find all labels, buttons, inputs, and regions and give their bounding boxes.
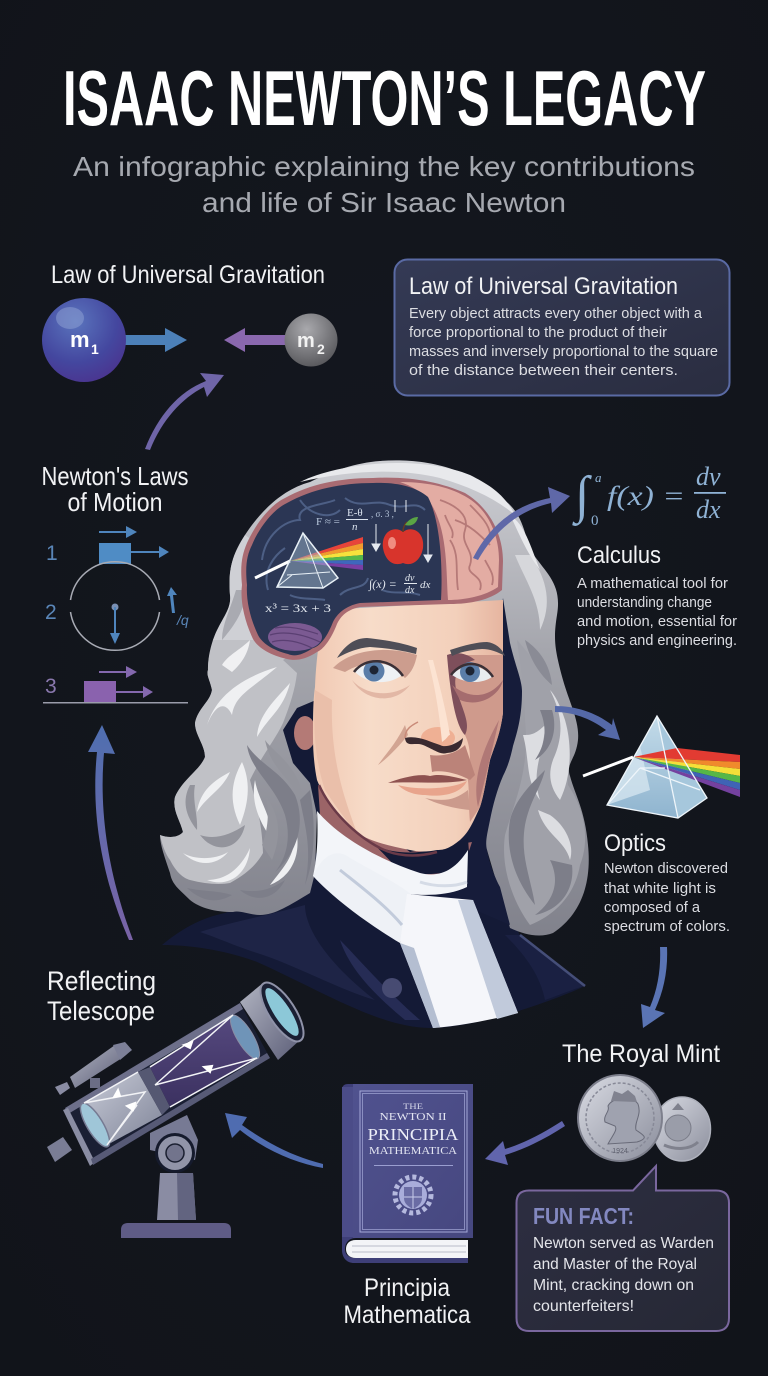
left brow: [337, 638, 417, 658]
telescope mount arm: [150, 1115, 198, 1160]
mass m1: 1: [91, 341, 99, 357]
left cheek edge shading: [314, 690, 357, 833]
brain equations: dx: [405, 585, 415, 596]
telescope rear window: [83, 1072, 162, 1145]
mass m2: m: [297, 330, 315, 352]
subtitle: [73, 151, 695, 218]
hair silhouette: [160, 460, 589, 935]
telescope front cap: [240, 983, 300, 1060]
brain equations: dv: [405, 573, 415, 584]
mini prism: [255, 533, 363, 588]
callout: fun fact: FUN FACT:: [533, 1203, 634, 1229]
text: optics: spectrum of colors.: [604, 918, 730, 935]
law 3: [43, 666, 188, 704]
arrow: optics to mint: [641, 947, 667, 1028]
telescope base: [121, 1223, 231, 1238]
mass m2: [284, 314, 338, 366]
arrow: mint to principia: [485, 1121, 565, 1165]
arrow: brain to calculus: [473, 487, 570, 560]
heading: the royal mint: The Royal Mint: [562, 1040, 720, 1068]
heading: law of universal gravitation: Law of Universal Gravitation: [51, 261, 325, 289]
heading: reflecting telescope: Reflecting: [47, 966, 156, 996]
cover text: THE: [403, 1102, 423, 1111]
arrow: motion to gravitation: [145, 373, 224, 450]
callout: fun fact: Newton served as Warden: [533, 1235, 714, 1252]
arrow: m1 force: [122, 328, 187, 352]
mass m2: 2: [317, 341, 325, 357]
text: calculus: A mathematical tool for: [577, 575, 728, 592]
cravat: [313, 811, 518, 1028]
hair: [160, 460, 589, 935]
panel: law of universal gravitation: Every object attracts every other object with a: [409, 305, 703, 322]
brain folds: [262, 498, 425, 600]
calculus formula: 0: [591, 513, 598, 529]
left dark strands: [187, 745, 314, 900]
large coin: 1924: [612, 1148, 628, 1155]
heading: reflecting telescope: [47, 966, 156, 1026]
upper left hair: [213, 535, 255, 640]
brain equations: ∫(x) =: [368, 577, 397, 591]
text: optics: Optics: [604, 830, 666, 857]
icon: coins: [577, 1074, 710, 1162]
arrow: telescope to laws of motion: [88, 725, 133, 940]
text: calculus: [577, 542, 737, 649]
telescope divider band: [138, 1067, 170, 1115]
calculus formula: dx: [696, 495, 721, 524]
brain equations: [265, 507, 430, 615]
small coin: [654, 1097, 710, 1161]
arrow: principia to telescope: [225, 1113, 323, 1168]
left eye: [354, 660, 403, 682]
text: optics: Newton discovered: [604, 860, 728, 877]
arrow: hair to optics: [555, 706, 620, 740]
subtitle: An infographic explaining the key contributions: [73, 151, 695, 182]
text: calculus: and motion, essential for: [577, 613, 737, 630]
book pages: [346, 1240, 468, 1258]
calculus formula: ∫: [572, 467, 592, 526]
coat: [162, 830, 585, 1028]
panel: law of universal gravitation: masses and inversely proportional to the square: [409, 343, 718, 360]
right dark strands: [509, 710, 572, 915]
heading: reflecting telescope: Telescope: [47, 996, 155, 1026]
text: optics: [604, 830, 730, 935]
calculus formula: a: [595, 470, 602, 485]
apple: [383, 517, 423, 564]
shadow between face and right hair: [440, 598, 522, 925]
mass m1: [42, 298, 126, 382]
dark inner panel: [246, 483, 442, 655]
arrow: m2 force: [224, 328, 290, 352]
ear: [294, 716, 316, 750]
panel: law of universal gravitation: [394, 260, 730, 396]
text: optics: composed of a: [604, 899, 701, 916]
heading: newton's laws of motion: [42, 461, 188, 517]
brain equations: n: [352, 521, 358, 533]
right eye: [451, 662, 493, 682]
right upper hair: [510, 515, 552, 685]
cover text: [368, 1102, 459, 1157]
icon: principia book: [342, 1084, 473, 1263]
cerebellum: [268, 623, 322, 651]
mouth: [388, 775, 467, 796]
telescope pillar: [157, 1173, 196, 1220]
panel: law of universal gravitation: force proportional to the product of their: [409, 324, 667, 341]
icon: optics prism: [583, 716, 740, 818]
icon: reflecting telescope: [47, 976, 311, 1238]
brain equations: F ≈ =: [316, 516, 340, 528]
left eye socket: [333, 650, 417, 678]
brain outline: [241, 478, 503, 660]
calculus formula: [572, 462, 726, 529]
diagram: two masses attracting: [42, 298, 338, 382]
brain equations: , σ. 3 ,: [371, 509, 394, 519]
callout: fun fact: and Master of the Royal: [533, 1256, 697, 1273]
law 3: 3: [45, 675, 57, 698]
telescope front window: [150, 1015, 257, 1107]
calculus formula: dv: [696, 462, 721, 491]
law 1: [46, 526, 169, 565]
gravity arrows: [372, 500, 432, 562]
law 2: 2: [45, 601, 57, 624]
nose: [405, 660, 463, 753]
callout: fun fact: [516, 1166, 729, 1331]
right side shading: [447, 655, 503, 822]
cover frame: [360, 1091, 467, 1232]
heading: principia mathematica: Mathematica: [344, 1301, 471, 1329]
cover text: MATHEMATICA: [369, 1145, 457, 1157]
telescope eyepiece: [47, 1137, 72, 1162]
brain equations: dx: [420, 579, 430, 591]
right brow: [450, 642, 505, 656]
shadow below nose: [430, 745, 475, 780]
right white strands: [523, 690, 571, 860]
pink cerebrum: [400, 482, 499, 600]
text: calculus: understanding change: [577, 594, 712, 611]
left light mass: [160, 630, 300, 884]
brain equations: E-θ: [347, 507, 363, 519]
spectrum: [633, 748, 740, 797]
law 2: [45, 562, 189, 650]
telescope mount ring: [155, 1133, 195, 1173]
jaw line: [319, 785, 437, 855]
under-chin shadow: [375, 838, 470, 874]
callout: fun fact: Mint, cracking down on: [533, 1277, 694, 1294]
neck: [318, 785, 472, 878]
telescope tube: [65, 1003, 270, 1165]
telescope light rays: [84, 1015, 257, 1145]
text: calculus: physics and engineering.: [577, 632, 737, 649]
gap behind ear: [283, 700, 330, 815]
cover text: NEWTON II: [380, 1111, 447, 1123]
book crest: [395, 1177, 431, 1213]
text: optics: that white light is: [604, 880, 716, 897]
law 2: /q: [176, 612, 189, 628]
cover text: PRINCIPIA: [368, 1125, 459, 1144]
law 1: 1: [46, 542, 58, 565]
text: calculus: Calculus: [577, 542, 661, 569]
exposed brain: [241, 478, 503, 660]
coat button: [382, 978, 402, 998]
subtitle: and life of Sir Isaac Newton: [202, 187, 566, 218]
calculus formula: f(x) =: [607, 481, 685, 511]
panel: law of universal gravitation: Law of Universal Gravitation: [409, 273, 678, 300]
left white strands: [183, 667, 298, 885]
diagram: three laws of motion: [43, 526, 189, 704]
nasolabial fold: [378, 725, 408, 765]
brain equations: x³ = 3x + 3: [265, 601, 331, 615]
callout: fun fact: counterfeiters!: [533, 1298, 634, 1315]
panel: law of universal gravitation: of the distance between their centers.: [409, 362, 678, 379]
heading: principia mathematica: [344, 1274, 471, 1329]
heading: principia mathematica: Principia: [364, 1274, 450, 1302]
heading: newton's laws of motion: Newton's Laws: [42, 461, 188, 491]
portrait: isaac newton: [160, 460, 589, 1028]
heading: newton's laws of motion: of Motion: [68, 487, 162, 517]
right light mass: [504, 640, 585, 925]
telescope finder scope: [55, 1042, 132, 1095]
top hair band: [300, 463, 515, 515]
face: [313, 600, 505, 855]
mass m1: m: [70, 327, 90, 352]
